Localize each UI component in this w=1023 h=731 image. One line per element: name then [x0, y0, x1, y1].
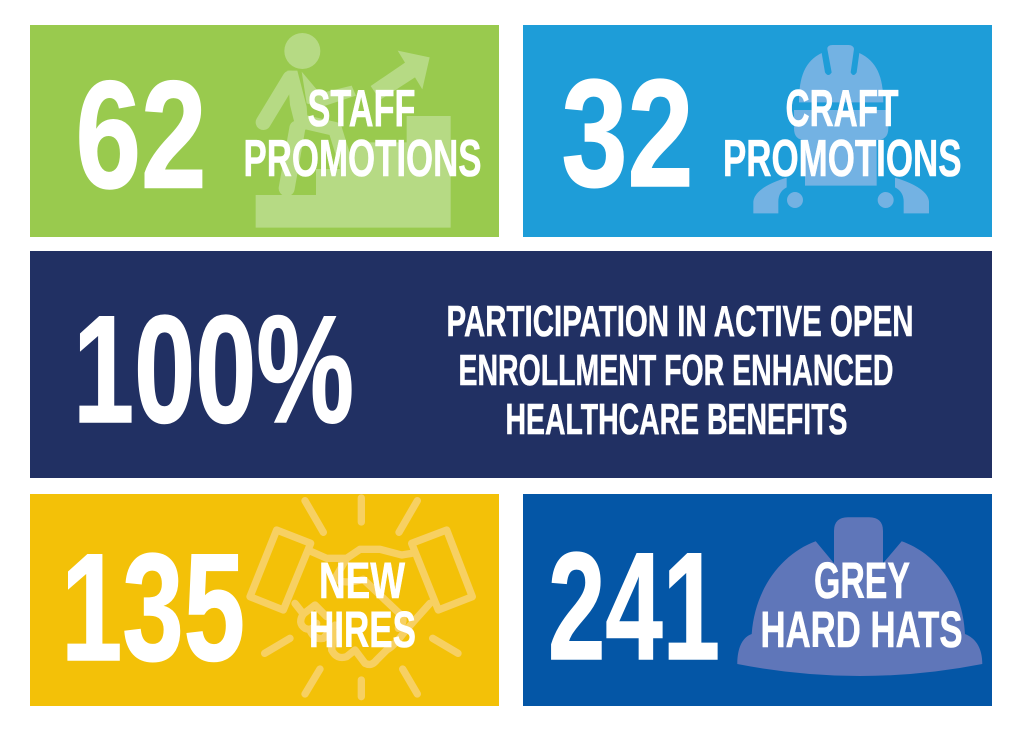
big number 62: 62 [76, 50, 206, 220]
label: grey hard hats: GREY [814, 552, 910, 609]
panel: open enrollment participation [30, 251, 992, 478]
label: new hires: HIRES [309, 601, 416, 658]
panel: grey hard hats [523, 494, 992, 706]
label: staff promotions [244, 80, 482, 188]
big number 100%: 100% [73, 284, 354, 455]
label: grey hard hats [760, 552, 962, 658]
label: staff promotions: STAFF [308, 80, 416, 138]
icon: handshake [250, 498, 472, 697]
big number 32: 32 [562, 48, 694, 219]
label: new hires: NEW [319, 552, 406, 609]
icon: person climbing stairs [256, 33, 451, 228]
icon: construction worker [753, 45, 929, 213]
panel: craft promotions [523, 25, 992, 237]
label: craft promotions: CRAFT [786, 80, 899, 138]
label: new hires [309, 552, 416, 658]
text block: enrollment description: HEALTHCARE BENEFITS [506, 395, 848, 444]
icon: hard hat [737, 517, 982, 676]
big number 135: 135 [61, 522, 245, 693]
label: staff promotions: PROMOTIONS [244, 130, 482, 188]
panel: new hires [30, 494, 499, 706]
panel: staff promotions [30, 25, 499, 237]
big number 241: 241 [548, 521, 720, 692]
label: craft promotions [723, 80, 962, 188]
text block: enrollment description [446, 297, 914, 444]
